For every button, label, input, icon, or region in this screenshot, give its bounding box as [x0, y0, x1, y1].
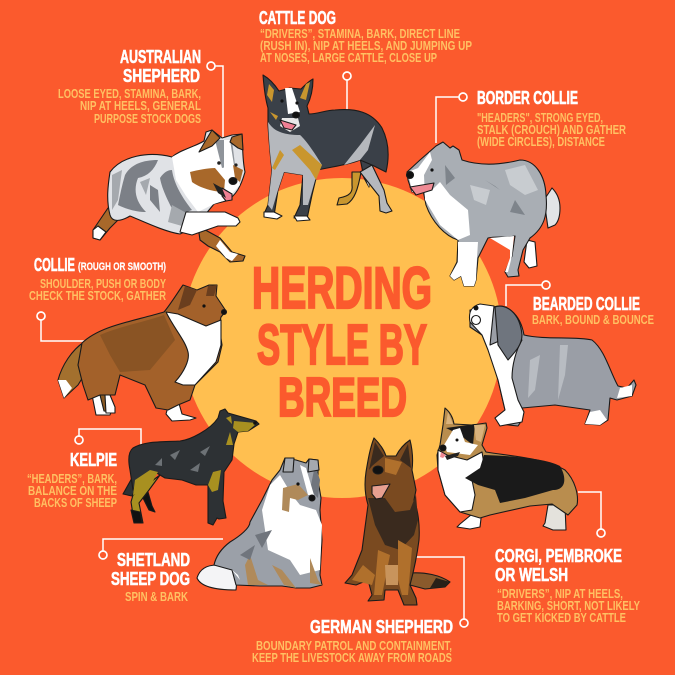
label: collie: (ROUGH OR SMOOTH): [78, 261, 166, 273]
connector: kelpie: [75, 429, 141, 445]
dog: collie: [58, 285, 226, 421]
connector: corgi: [578, 492, 605, 537]
label: australian shepherd: SHEPHERD: [123, 66, 200, 86]
label: corgi: CORGI, PEMBROKE: [495, 546, 622, 566]
label: kelpie: BALANCE ON THE: [28, 483, 117, 498]
label: australian shepherd: PURPOSE STOCK DOGS: [94, 111, 201, 126]
central sun circle: [182, 178, 502, 498]
label: border collie: STALK (CROUCH) AND GATHER: [477, 122, 626, 137]
label: corgi: “DRIVERS”, NIP AT HEELS,: [497, 586, 623, 601]
connector: australian shepherd: [207, 62, 223, 138]
label: australian shepherd: [58, 47, 201, 126]
label: german shepherd: GERMAN SHEPHERD: [310, 617, 453, 637]
label: cattle dog: AT NOSES, LARGE CATTLE, CLOSE UP: [260, 50, 437, 65]
label: collie: [29, 255, 166, 303]
dog: bearded collie: [469, 304, 636, 426]
label: cattle dog: “DRIVERS”, STAMINA, BARK, DIRECT LINE: [260, 26, 460, 41]
label: collie: COLLIE: [34, 255, 75, 275]
label: cattle dog: CATTLE DOG: [259, 8, 336, 28]
label: corgi: OR WELSH: [495, 565, 568, 585]
dog: cattle dog: [263, 75, 392, 221]
label: german shepherd: KEEP THE LIVESTOCK AWAY FROM ROADS: [252, 650, 452, 665]
title: STYLE BY: [257, 313, 427, 377]
connector: cattle dog: [343, 72, 351, 110]
label: collie: CHECK THE STOCK, GATHER: [29, 288, 166, 303]
label: corgi: TO GET KICKED BY CATTLE: [497, 610, 626, 625]
label: kelpie: BACKS OF SHEEP: [34, 495, 117, 510]
connector: bearded collie: [506, 281, 550, 306]
label: shetland sheep dog: SHEEP DOG: [111, 569, 190, 589]
label: shetland sheep dog: SPIN & BARK: [125, 589, 188, 604]
title: [252, 256, 432, 428]
label: corgi: [495, 546, 640, 625]
label: border collie: "HEADERS", STRONG EYED,: [477, 110, 603, 125]
label: kelpie: KELPIE: [70, 450, 117, 470]
dog: australian shepherd: [93, 130, 245, 262]
label: border collie: (WIDE CIRCLES), DISTANCE: [477, 134, 605, 149]
title: HERDING: [252, 256, 432, 321]
label: bearded collie: [532, 294, 654, 327]
label: collie: SHOULDER, PUSH OR BODY: [40, 276, 166, 291]
connector: german shepherd: [412, 557, 468, 627]
label: shetland sheep dog: SHETLAND: [117, 550, 190, 570]
dog: corgi: [437, 408, 578, 530]
label: border collie: [477, 88, 626, 149]
dog: kelpie: [123, 409, 259, 525]
label: cattle dog: [259, 8, 472, 65]
connector: shetland sheep dog: [99, 539, 223, 559]
label: german shepherd: BOUNDARY PATROL AND CONTAINMENT,: [256, 638, 452, 653]
label: australian shepherd: NIP AT HEELS, GENERAL: [80, 98, 201, 113]
connector: collie: [37, 312, 86, 341]
label: australian shepherd: LOOSE EYED, STAMINA, BARK,: [58, 86, 201, 101]
label: shetland sheep dog: [111, 550, 190, 604]
title: BREED: [278, 366, 407, 428]
label: border collie: BORDER COLLIE: [477, 88, 578, 108]
label: kelpie: “HEADERS”, BARK,: [27, 471, 117, 486]
label: cattle dog: (RUSH IN), NIP AT HEELS, AND JUMPING UP: [260, 38, 472, 53]
dog: shetland sheep dog: [197, 458, 322, 590]
label: german shepherd: [252, 617, 453, 665]
dog: border collie: [406, 142, 560, 286]
label: kelpie: [27, 450, 117, 510]
dog: german shepherd: [345, 438, 450, 605]
label: australian shepherd: AUSTRALIAN: [120, 47, 201, 67]
connector: border collie: [436, 93, 467, 143]
